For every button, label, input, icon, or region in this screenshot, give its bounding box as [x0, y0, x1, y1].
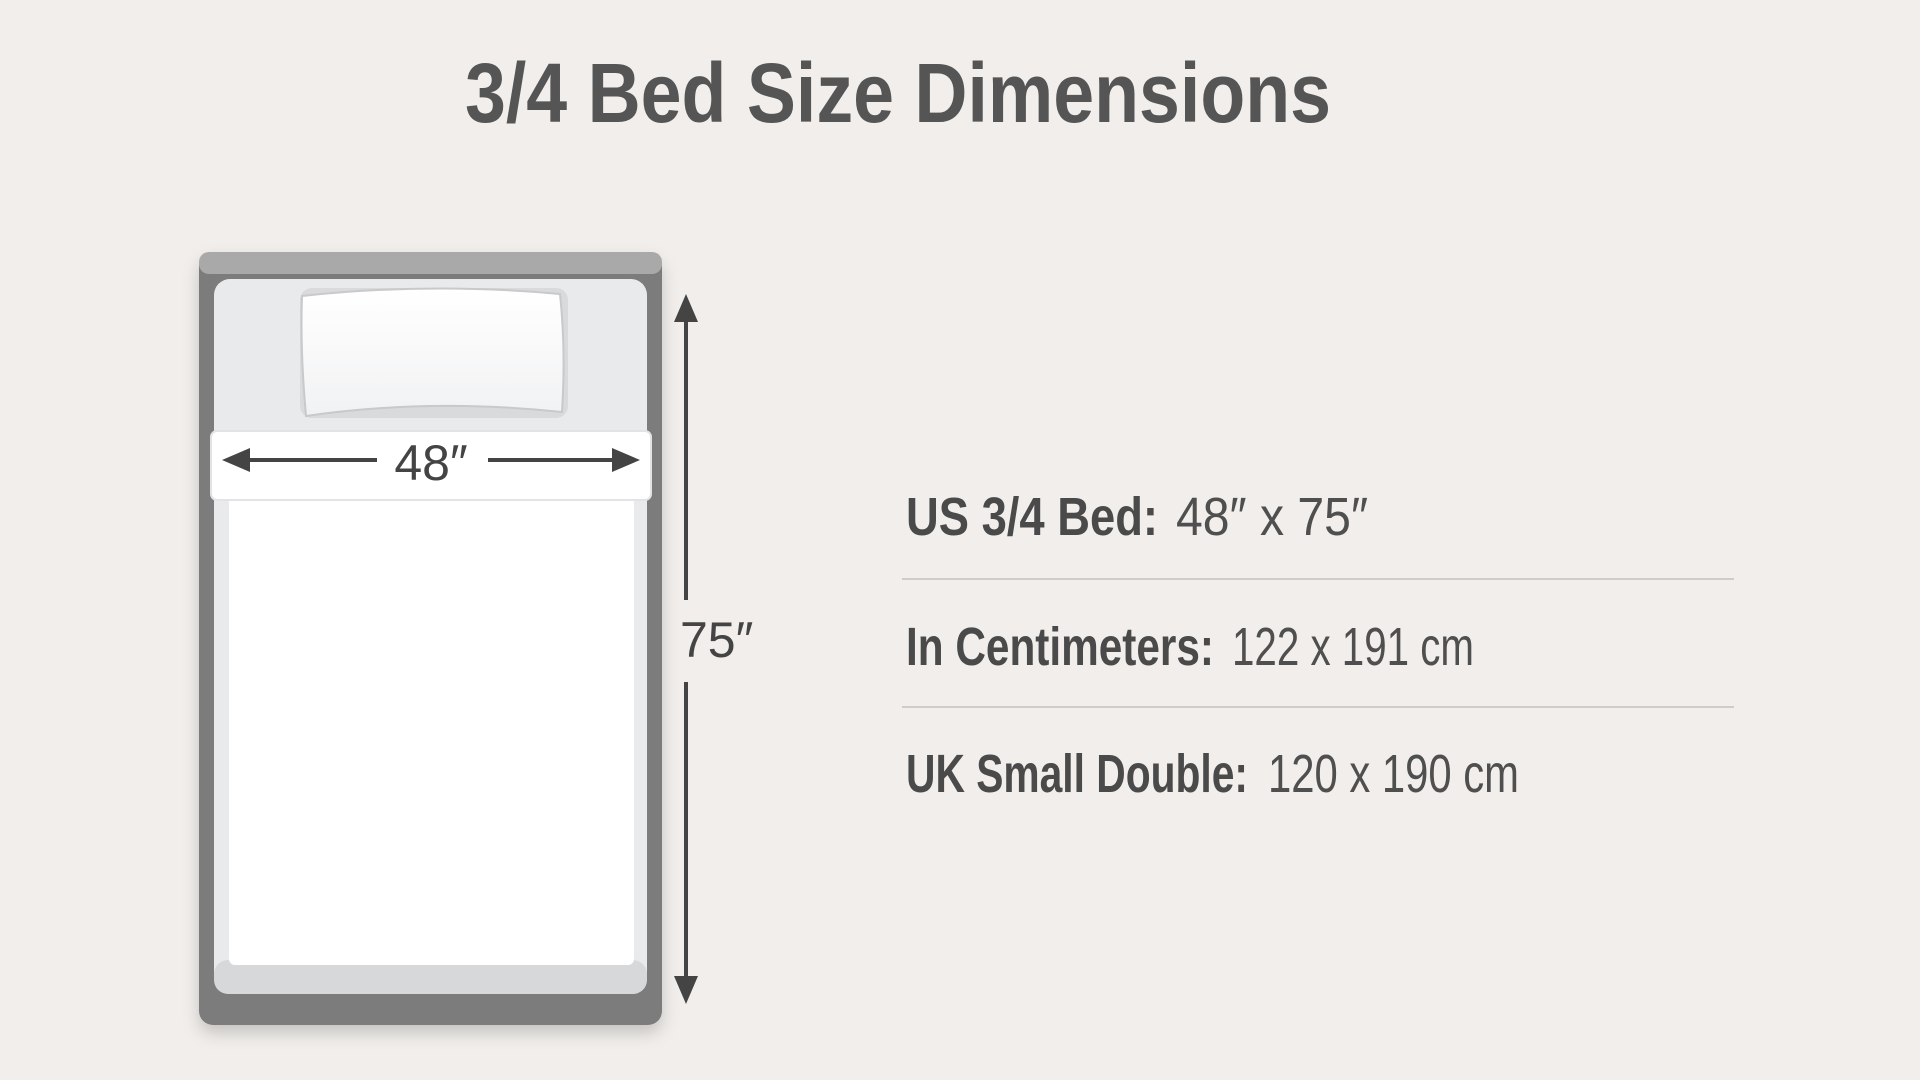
blanket [229, 495, 634, 965]
bed illustration [199, 252, 662, 1025]
spec row: UK: 120 x 190 cm [1268, 744, 1519, 804]
mattress [214, 279, 647, 994]
spec row: centimeters [906, 617, 1474, 677]
bed frame [199, 252, 662, 1025]
width arrow 48 [222, 435, 640, 491]
spec row: US: 48″ x 75″ [1176, 487, 1368, 547]
title: 3/4 Bed Size Dimensions [465, 46, 1331, 140]
sheet fold band [211, 431, 651, 500]
spec row: US [906, 487, 1368, 547]
spec row: US: US 3/4 Bed: [906, 487, 1158, 547]
spec row: centimeters: 122 x 191 cm [1232, 617, 1474, 677]
width arrow 48: 48″ [394, 435, 468, 491]
spec row: centimeters: In Centimeters: [906, 617, 1214, 677]
length arrow 75 [674, 294, 753, 1004]
spec row: UK: UK Small Double: [906, 744, 1248, 804]
pillow [300, 288, 568, 418]
length arrow 75: 75″ [680, 612, 753, 668]
